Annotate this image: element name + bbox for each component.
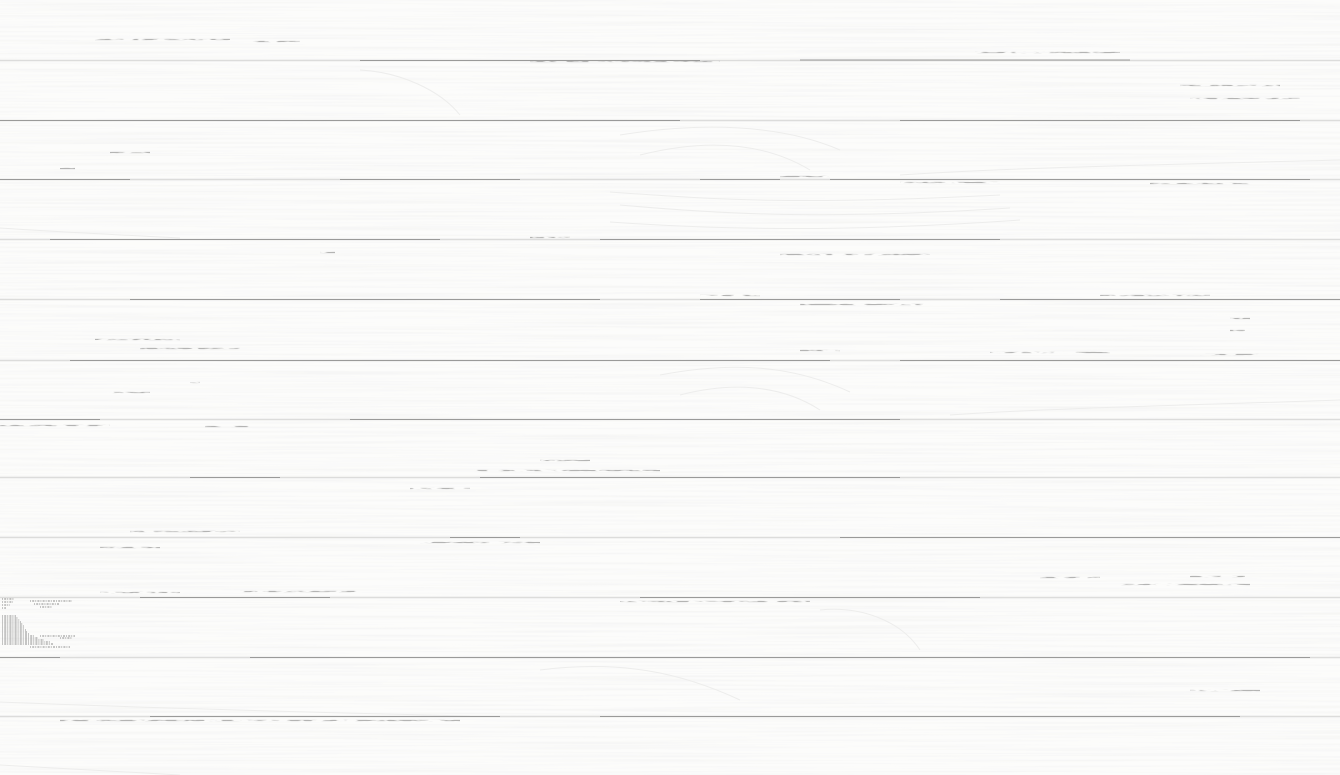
wood knot: lower left	[2, 599, 75, 647]
